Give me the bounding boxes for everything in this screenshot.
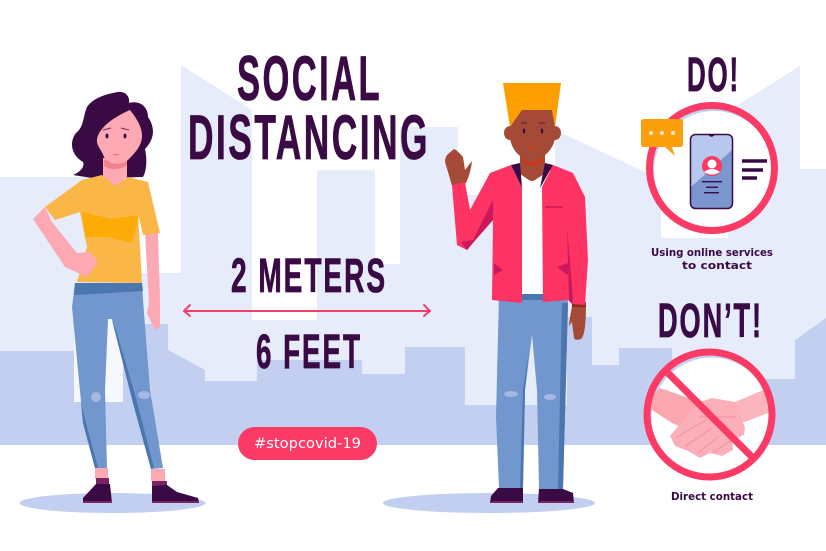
distance label: 6 feet: 6 FEET xyxy=(256,326,362,379)
woman hand on hip xyxy=(65,252,98,277)
man jacket xyxy=(452,165,588,305)
man lower hand xyxy=(569,302,586,340)
caption: don't: Direct contact xyxy=(671,490,753,503)
chat bubble xyxy=(641,119,683,156)
woman jeans waistband xyxy=(74,283,143,295)
woman right arm xyxy=(145,233,160,330)
man waving hand xyxy=(445,149,472,186)
ground shadow: man xyxy=(383,493,595,513)
man choker shadow xyxy=(520,158,545,166)
woman shirt xyxy=(45,175,160,283)
prohibition slash xyxy=(665,370,754,459)
man jeans xyxy=(496,296,568,489)
man cuff xyxy=(572,303,586,307)
man face xyxy=(510,108,555,162)
man facial features xyxy=(521,123,545,150)
hashtag pill: #stopcovid-19 xyxy=(254,436,361,452)
circle ring xyxy=(650,106,774,230)
woman jeans xyxy=(72,283,163,469)
icon: don't circle with handshake xyxy=(640,352,780,478)
woman neck xyxy=(103,158,127,187)
woman hair xyxy=(72,92,153,178)
man collar xyxy=(511,163,553,188)
man neck xyxy=(511,155,553,182)
woman shoes xyxy=(83,484,199,503)
ground shadow: woman xyxy=(20,493,206,513)
man hair xyxy=(503,83,561,127)
distance label: 2 meters: 2 METERS xyxy=(231,250,387,303)
icon: do circle with phone xyxy=(641,106,774,231)
woman chin shadow xyxy=(104,158,127,169)
phone xyxy=(690,134,732,208)
woman face xyxy=(97,110,142,164)
character: woman xyxy=(33,92,199,503)
hashtag pill xyxy=(238,427,377,460)
woman left arm xyxy=(33,207,98,277)
caption: do xyxy=(651,246,773,272)
woman knee patches xyxy=(91,391,150,402)
text lines xyxy=(742,161,767,178)
character: man xyxy=(445,83,588,503)
man ears xyxy=(504,126,561,140)
man jeans waistband xyxy=(520,294,545,300)
man jeans shadows xyxy=(520,303,568,489)
title xyxy=(188,44,430,173)
circle background xyxy=(652,108,772,228)
title: SOCIAL xyxy=(237,44,382,114)
caption: do: Using online services xyxy=(651,246,773,259)
circle background xyxy=(650,354,770,474)
woman socks xyxy=(96,478,167,487)
woman jeans shadows xyxy=(81,320,154,469)
man shoes xyxy=(490,488,574,503)
woman shirt band xyxy=(82,212,139,243)
title: DISTANCING xyxy=(188,103,430,173)
man jacket shadows and pockets xyxy=(461,200,573,304)
man shirt xyxy=(520,178,545,298)
caption: do: to contact xyxy=(682,259,752,272)
handshake xyxy=(650,388,768,458)
arrow: two-way distance xyxy=(184,305,430,316)
circle ring xyxy=(647,352,772,477)
woman facial features xyxy=(103,128,129,156)
woman ankles xyxy=(95,468,165,481)
man knee patches xyxy=(504,391,556,400)
heading: do: DO! xyxy=(687,49,740,102)
